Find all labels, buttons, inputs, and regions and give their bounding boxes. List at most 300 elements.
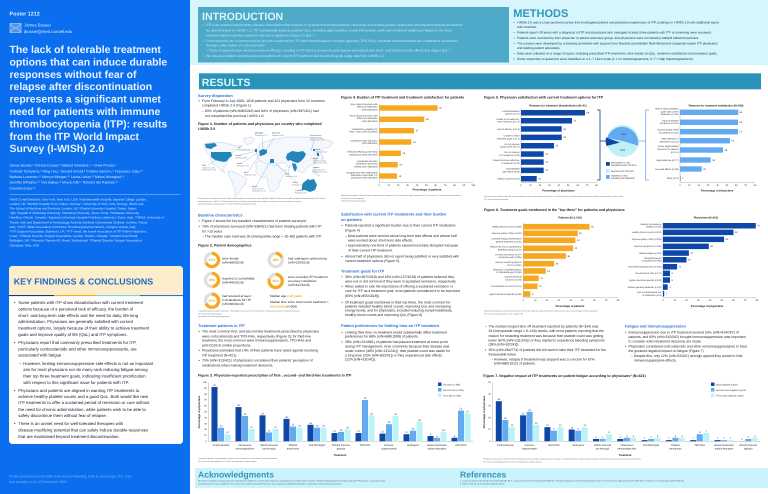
figure 3 y axis: 40 [204, 416, 208, 419]
figure 2: demographic rings: (n/N=490/1018) [222, 280, 244, 284]
text block: patient preferences: 28% (n/N=241/861) of patients had paused treatment at some point [345, 340, 448, 344]
satisfaction values [682, 111, 743, 180]
figure 4 x axis [379, 184, 476, 187]
text block: baseline characteristics: Figure 2 shows the key baseline characteristics of patients surveyed. [202, 219, 307, 223]
text block: baseline characteristics: • [198, 225, 200, 229]
figure 2: demographic rings: 67% [209, 258, 215, 262]
figure 7 y axis: 0 [490, 440, 492, 443]
physicians x axis: 70 [744, 299, 747, 302]
map country labels: Patients n=60 [244, 174, 256, 176]
figure 3 bar values: 44 [370, 412, 373, 415]
figure 4 footnote: Data from full patient population. [341, 200, 367, 203]
figure 7 footnote: ITP, immune thrombocytopenia; TPO-RAs, thrombopoietin receptor agonists. [483, 460, 543, 463]
text block: time off treatment: (n/N=680/1012) of patients. [494, 362, 536, 366]
dissatisfaction labels: Safety concerns (n=5) [497, 178, 520, 181]
text block: treatment goals: Treatment goals for ITP [341, 268, 385, 273]
text block: time off treatment: • [485, 348, 487, 352]
figure 4 category labels: benefit (n/N=196/1016) [354, 165, 378, 168]
figure 6: physicians bar chart: Percentage of physicians [691, 305, 724, 308]
figure 7 bar values: 3 [675, 435, 677, 438]
figure 7 bar values: 10 [570, 426, 574, 430]
dissatisfaction values: 43 [563, 136, 567, 139]
figure 4 category labels: Difficulty keeping up with daily [348, 151, 378, 154]
figure 4 category labels: (n/N=630/1016) [362, 108, 378, 111]
physicians x axis: 30 [697, 299, 700, 302]
dissatisfaction labels: Do not improve [504, 143, 520, 146]
text block: fatigue and immunosuppression: Physicians considered corticosteroids and other immunosuppressants to have [628, 344, 747, 348]
figure 7 legend: Second most negative impact [716, 389, 746, 392]
figure 7 bar values: 14 [535, 422, 538, 425]
map country labels: Denmark [272, 132, 281, 134]
figure 4 x axis: 30 [406, 184, 409, 187]
text block: satisfaction: • [342, 254, 344, 258]
text block: treatment goals: cure for ITP as a treatment goal, most patients considered it to be important [345, 289, 460, 293]
figure 2: demographic rings: had received at least [222, 294, 251, 298]
physicians x axis [662, 299, 759, 302]
figure 3 category labels: Anti-CD20 [455, 444, 467, 447]
physicians x axis: 0 [662, 299, 664, 302]
patients x axis: 10 [534, 299, 537, 302]
contact details: James Bussel [24, 22, 51, 27]
figure 3 bar values: 23 [220, 425, 223, 428]
figure 5 footnote: ITP, immune thrombocytopenia. [484, 198, 509, 201]
figure 2: demographic rings: (n/N=683/1018) [222, 302, 244, 306]
satisfaction labels: Wide selection of [661, 138, 679, 141]
figure 7 footnote [483, 458, 642, 463]
affiliations: ¹Weill Cornell Medicine, New York, New York, USA; ²Hammersmith Hospital, Imperial College London, [10, 197, 147, 201]
text block: treatment patterns: Treatment patterns in ITP [198, 323, 245, 328]
physicians labels: Slow/halt/prevent [644, 257, 662, 260]
figure 7 bar values: 2 [620, 436, 622, 439]
map country labels: Patients n=50 [272, 134, 284, 137]
figure 3 bar values: 23 [298, 425, 301, 428]
figure 3 bar values: 14 [357, 430, 360, 433]
text block: survey disposition [198, 93, 325, 118]
figure 3 bar values: 9 [430, 433, 432, 436]
figure 5: dissatisfaction bar chart: Percentage of physicians [542, 190, 575, 192]
figure 7 bar values: 3 [754, 435, 756, 438]
figure 7 category labels: Immuno- [525, 444, 535, 447]
physicians labels: Reduce spontaneous [640, 223, 662, 226]
figure 2: demographic rings: (n/N=688/1018) [222, 260, 244, 264]
dissatisfaction values: 43 [563, 128, 567, 131]
figure 7 bar values: 12 [583, 424, 587, 427]
authors: Caroline Enzer¹⁹ [10, 186, 36, 190]
affiliations: Cleveland, Ohio, USA [10, 243, 40, 247]
physicians values: 20 [688, 259, 691, 262]
satisfaction x axis: 50 [726, 184, 729, 187]
text block: treatment patterns: anti-CD20 at similar proportions. [202, 344, 251, 348]
title: Survey (I-WISh) 2.0 [10, 144, 104, 155]
panel: top band [190, 0, 768, 65]
figure 1 title: I-WISh 2.0 [198, 127, 215, 131]
text block: fatigue and immunosuppression: immunosuppressive effects. [634, 358, 677, 362]
figure 3 bar values: 47 [466, 411, 469, 414]
text block: fatigue and immunosuppression: the greatest negative impact on fatigue (Figure 7) [628, 349, 704, 353]
key findings text: There is an unmet need for well-tolerated therapies with [18, 421, 124, 426]
text block: time off treatment: – [485, 324, 487, 328]
figure 3 bar values: 18 [412, 428, 415, 431]
dissatisfaction values: 54 [574, 120, 577, 123]
satisfaction labels [655, 108, 679, 180]
map country labels: Patients n=80 [235, 156, 247, 160]
figure 5: satisfaction pie chart [606, 125, 639, 180]
authors: Yoshiaki Tomiyama,⁶ Ming Hou,⁷ Donald Arnold,⁸ Cristina Santoro,⁹ Francesco Zaja,¹⁰ [10, 169, 143, 173]
satisfaction labels: (n=114) [671, 151, 679, 154]
introduction text: – These treatments have limited sustained efficacy, resulting in ITP chronic treatment, and may be associated with short- and long-term side effects that impact QoL.⁵ [206, 49, 451, 53]
physicians values: 4 [669, 286, 671, 289]
dissatisfaction labels: term remission (n=17) [498, 121, 520, 124]
dissatisfaction labels [493, 110, 520, 181]
figure 7 bar values: 25 [528, 409, 532, 412]
figure 3 title: Figure 3. Physician-reported prescription of first-, second- and third-line treatments in ITP [198, 374, 352, 378]
figure 2: demographic rings: had undergone splenectomy [288, 256, 327, 260]
introduction text: Corticosteroids are recommended as first-line treatment for ITP, while thrombopoietin receptor agonists (TPO-RAs), rituximab and fostamatinib are established second-line [206, 39, 458, 43]
figure 7 bar values: 3 [657, 435, 659, 438]
text block: satisfaction: of their current ITP treatment. [348, 248, 393, 252]
figure 1 footnote: The participant numbers from each country include patients and physicians who completed I-WISh 2.0 and were recruited by Adelphi fieldwork partners; ITP, immune [198, 197, 326, 200]
text block: patient preferences: under control (40% [n/N=131/241]), their platelet count was stable for [345, 349, 451, 353]
figure 3 category labels: (no therapy) [262, 448, 276, 450]
methods text: I-WISh 2.0 was a cross-sectional survey that investigated patient and physician experiences of ITP, building on I-WISh 1.0 with additional topics [517, 20, 720, 24]
figure 2 footnote [198, 310, 301, 318]
physicians labels: bleeds (n=333) [646, 226, 662, 229]
physicians values: 79 [757, 225, 760, 228]
satisfaction labels: for patients (n=152) [659, 132, 679, 134]
figure 4 x axis: 70 [444, 184, 447, 187]
text block: time off treatment: lower (67% [n/N=151/241]) or they started to experience bleeding symptoms [488, 338, 605, 342]
figure 4 x axis: 50 [425, 184, 428, 187]
text block: time off treatment: – However, relapse if treatment was stopped was a concern for 67% [491, 357, 595, 361]
patients labels: of steroids/drugs (n=196) [496, 271, 522, 274]
text block: time off treatment: (38% [n/N=92/241]). [488, 343, 519, 347]
pie legend [606, 162, 637, 180]
text block: patient preferences: preferences for 68% (n/N=688/1008) of patients. [345, 334, 419, 338]
figure 4 category labels: Disagree that their medications [346, 171, 378, 174]
figure 2: demographic rings: 2 medications for ITP [222, 298, 251, 302]
pie legend: Dissatisfied or very [611, 162, 631, 164]
figure 4 category labels: treatment's perceived [356, 163, 378, 166]
affiliations: Italy; ¹¹APIT, Italian Association of Immune Thrombocytopenia Patients, Cologna Veneta, Italy; [10, 225, 136, 229]
figure 6: patients bar chart: Percentage of patients [556, 305, 585, 308]
map country labels: Physicians n=19 [313, 170, 327, 174]
text block: fatigue and immunosuppression: patients, and 63% (n/N=315/502) thought immunosuppression was important [628, 335, 746, 339]
affiliations [10, 197, 164, 247]
dissatisfaction values: 68 [586, 112, 590, 115]
map country labels: Patients n=50 [310, 136, 322, 140]
figure 7 bar values: 9 [578, 428, 580, 431]
satisfaction x axis: 60 [735, 184, 738, 187]
patients x axis: 0 [523, 299, 525, 302]
figure 7 category labels [497, 444, 758, 450]
map country labels: Patients n=72 [255, 134, 267, 137]
map country labels: Patients n=70 [237, 164, 249, 168]
figure 4 category labels [346, 103, 378, 180]
figure 7 bar values: 1 [693, 437, 695, 440]
text block: patient preferences: • [342, 330, 344, 334]
figure 3 bar values: 23 [316, 425, 319, 428]
dissatisfaction values: 24 [545, 169, 549, 172]
figure 4 x axis: 10 [387, 184, 391, 187]
text block: treatment patterns: 73% (n/N=313/421) of physicians considered their patients' perception of [202, 359, 313, 363]
map country labels: Patients n=30 [313, 168, 325, 172]
figure 3 bar values: 14 [333, 430, 336, 433]
figure 7 legend: Third most negative impact [716, 394, 744, 398]
figure 7 y axis: 20 [488, 416, 492, 419]
figure 3 y axis: 60 [204, 405, 208, 408]
figure 3 bar values: 20 [346, 426, 349, 430]
methods text: • [514, 36, 515, 40]
methods text: The surveys were developed by a steering committee with support from Novartis and Adelphi Real World and comprised expert ITP physicians [517, 41, 718, 45]
figure 7 bar values: 3 [626, 435, 628, 438]
panel: left sidebar [0, 0, 190, 494]
figure 3 y axis: 20 [204, 428, 208, 431]
icon: email envelope [10, 24, 21, 32]
satisfaction values: 54 [732, 140, 735, 143]
satisfaction x axis: 70 [744, 184, 748, 187]
patients labels [489, 226, 522, 296]
figure 3 category labels: Watch-and-wait [260, 444, 278, 447]
figure 3 bar values: 58 [237, 404, 240, 407]
introduction text: ITP is an acquired autoimmune disease characterized by reduced or persistent thrombocytopenia caused by accelerated platelet destruction and impaired platelet production¹ [206, 23, 464, 27]
affiliations: Trieste, Italy and Department of Hematology, Azienda Sanitaria Universitaria Giuliana, Isontina, Trieste, [10, 220, 148, 224]
text block: survey disposition: not completed the previous I-WISh 1.0. [205, 114, 264, 118]
figure 7 category labels: Anti-CD20 [548, 444, 560, 447]
satisfaction values: 60 [740, 121, 743, 124]
map country labels: France [235, 154, 241, 157]
patients labels: Reduce the risk of spontaneous [490, 246, 522, 249]
text block: satisfaction: were worried about short-term side effects. [348, 238, 413, 242]
key findings text: • [14, 388, 16, 393]
meeting footnote [9, 474, 132, 484]
figure 3 legend: First line (n=395) [443, 384, 461, 386]
key findings text: • [14, 421, 16, 426]
figure 4 values: 23 [402, 152, 406, 155]
figure 4 x axis: 100 [471, 184, 476, 187]
dissatisfaction labels: ITP symptoms (n=8) [499, 154, 520, 157]
figure 3 y axis: 10 [204, 434, 208, 437]
satisfaction labels: Drives target platelet [658, 145, 679, 148]
dissatisfaction x axis: 70 [586, 184, 589, 187]
figure 3 category labels: Intravenous [238, 444, 252, 447]
map country labels: Taiwan [313, 166, 320, 169]
text block: satisfaction: Satisfaction with current ITP treatments and their burden [341, 212, 447, 217]
physicians values: 12 [679, 266, 682, 269]
methods text: Patients aged >18 years with a diagnosis of ITP and physicians who managed at least three patients with ITP at screening were surveyed. [517, 30, 712, 34]
physicians x axis: 10 [674, 299, 677, 302]
text block: time off treatment: reason for restarting treatment was because their platelet count was getting [488, 334, 603, 338]
key findings text: • [14, 300, 16, 305]
satisfaction values: 1 [682, 177, 684, 180]
figure 7 bar values: 1 [644, 437, 646, 440]
figure 7: grouped bar chart: Percentage of physicians [483, 395, 486, 428]
satisfaction x axis: 20 [698, 184, 701, 187]
figure 1 title: Figure 1. Number of patients and physicians per country who completed [198, 122, 322, 126]
figure 3 bar values: 52 [460, 408, 463, 411]
map country labels: Patients n=150 [202, 166, 215, 170]
affiliations: The School of Medicine and Dentistry, London, UK; ⁶Osaka University Hospital, Osaka, Japan; [10, 206, 137, 210]
dissatisfaction labels: quality of life (n=11) [500, 146, 520, 149]
figure 4: horizontal bar chart: Percentage of patients [413, 189, 442, 192]
figure 7 bar values: 2 [650, 436, 652, 439]
text block: fatigue and immunosuppression: – Despite this, only 12% (n/N=52/421) strongly agreed they aimed to limit [631, 354, 742, 358]
figure 5: satisfaction bar chart: Reasons for treatment satisfaction (N=268) [689, 105, 743, 108]
map country labels: India [285, 172, 290, 176]
patients labels: function (n=133) [505, 278, 522, 282]
physicians x axis: 60 [732, 299, 735, 302]
figure 2: demographic rings: at survey completion [288, 279, 317, 283]
satisfaction labels: symptoms (n=154) [660, 122, 679, 125]
panel: methods [513, 8, 720, 61]
figure 3 bar values: 29 [388, 421, 391, 424]
figure 2: demographic rings: were female [222, 256, 239, 260]
figure 6: patients bar chart [489, 216, 620, 308]
figure 7 category labels: Intravenous [620, 444, 634, 447]
methods text: Some responses to questions were classified on a 1–7 Likert scale (1 = no impact/agreement; 6–7 = high impact/agreement). [517, 57, 694, 61]
patients values: 56 [591, 226, 594, 228]
physicians labels: Decreased hospitalization (n=50) [629, 266, 662, 269]
figure 3 category labels: Platelet [289, 444, 297, 447]
patients labels: Improve physical [505, 276, 522, 279]
text block: time off treatment: 35% (n/N=264/774) of patients did not want to take their ITP treatment for the [488, 348, 606, 352]
physicians labels: Reduce fatigue (n=94) [639, 252, 662, 255]
methods text: • [514, 57, 515, 61]
map country labels: USA [202, 164, 207, 167]
key findings text: their top three treatment goals, indicating insufficient prioritization [23, 374, 146, 378]
text block: time off treatment: 34 (interquartile range = 6–104) weeks, with most patients reporting that the [488, 329, 604, 333]
text block: treatment patterns: Physicians estimated that 14% of their patients have opted against receiving [202, 349, 318, 353]
figure 3 bar values: 16 [442, 429, 445, 432]
figure 7 category labels: Platelet [671, 444, 680, 447]
figure 3 bar values: 70 [364, 397, 367, 400]
acknowledgments [198, 469, 385, 485]
figure 4 category labels: medications (n/N=234/1016) [349, 153, 378, 156]
figure 3 category labels: Androgens [407, 444, 420, 447]
text block: fatigue and immunosuppression: to consider when treatment decisions are made. [628, 339, 702, 343]
figure 2: demographic rings: were receiving ITP treatment [288, 275, 328, 279]
figure 5: satisfaction pie chart: 64% [621, 133, 627, 136]
key findings text: administration. Physicians are generally satisfied with current [18, 319, 134, 324]
figure 7 category labels: TPO-RAs [694, 444, 706, 447]
figure 2: demographic rings: reported ≥1 comorbidity [222, 276, 255, 280]
key findings text: associated with fatigue [18, 352, 62, 358]
contact details [23, 22, 73, 34]
figure 7 bar values: 1 [730, 437, 732, 440]
patients values: 19 [547, 270, 551, 273]
affiliations: Israel; ¹⁴Platelet Disorder Support Association, London, Ontario, Canada; ¹⁵Adelphi Real World, [10, 234, 138, 238]
dissatisfaction labels: Patients become refractory [493, 159, 520, 162]
physicians values: 39 [710, 245, 714, 248]
figure 6 footnote: Patients and physicians were asked to select the three most important goals of treatment; responses are shown as percentages of each population. [484, 310, 599, 312]
text block: survey disposition: Survey disposition [198, 93, 233, 98]
affiliations: Hamilton, Ontario, Canada; ⁹Sapienza University Hospital Policlinico Umberto I, Rome, Italy; ¹⁰SRSA, University of [10, 216, 164, 220]
figure 7 bar values: 2 [595, 436, 597, 439]
figure 3 footnote [198, 457, 278, 463]
text block: treatment goals: (83% [n/N=855/1018]). [345, 294, 380, 298]
pie legend: dissatisfied (n/N=31/421) [611, 164, 637, 167]
introduction text: • [202, 39, 204, 43]
figure 6 footnote: ITP, immune thrombocytopenia; QoL, quality of life. [484, 312, 524, 315]
figure 4 category labels: Bothered by needing ITP [353, 128, 378, 131]
figure 4 title: Figure 4. Burden of ITP treatment and treatment satisfaction for patients [341, 95, 464, 99]
introduction text: • [202, 23, 204, 27]
figure 3 category labels [213, 444, 467, 450]
dissatisfaction labels: side effects (n=8) [502, 170, 520, 173]
patients labels: Increase energy levels/reduce [491, 238, 522, 241]
text block: treatment goals: • [342, 300, 344, 304]
figure 5 footnote [484, 195, 624, 201]
patients x axis: 40 [569, 299, 573, 302]
text block: fatigue and immunosuppression: • [625, 331, 627, 335]
patients labels: Improve overall symptoms [495, 261, 522, 264]
satisfaction labels: Improve quality of life [657, 129, 679, 132]
text block: treatment patterns: • [198, 359, 200, 363]
figure 5: dissatisfaction bar chart: Reasons for treatment dissatisfaction (N=31) [529, 105, 587, 108]
text block: treatment patterns: • [198, 349, 200, 353]
text block: baseline characteristics: • [198, 219, 200, 223]
map country labels: Germany [255, 132, 264, 134]
figure 7 category labels: Anti-fibrinolytic [643, 444, 660, 447]
figure 7 bar values: 7 [706, 430, 708, 433]
figure 7 legend: Most negative impact [716, 384, 738, 386]
title: from the ITP World Impact [10, 132, 140, 143]
physicians labels: Less strong/frequent use [637, 291, 662, 294]
figure 3 category labels: transfusion [287, 448, 300, 450]
dissatisfaction labels: Do not improve [504, 151, 520, 154]
map country labels: Physicians n=70 [202, 168, 216, 172]
satisfaction labels: Improve disease [662, 119, 679, 122]
dissatisfaction labels: to treatment (n=8) [502, 162, 520, 165]
methods text: • [514, 30, 515, 34]
figure 6 footnote [484, 310, 599, 315]
figure 4 x axis: 80 [453, 184, 456, 187]
methods text: Data were collected on a range of topics, including prescribed ITP treatments, their impact on QoL, treatment satisfaction and treatment goals. [517, 51, 717, 55]
figure 3 category labels: Anti-fibrinolytic [309, 444, 326, 447]
title: need for patients with immune [10, 107, 160, 118]
figure 7 footnote: *Physicians were asked to rank the top three treatments with the greatest negative impact on fatigue; †Cyclophosphamide, mycophenolate, ciclosporin and azathioprine, among other immunosuppressants. [483, 458, 642, 460]
dissatisfaction labels: Unable to reach [504, 134, 520, 138]
figure 7 bar values: 12 [510, 424, 514, 427]
physicians labels: Reduce general weakness (n=16) [628, 286, 662, 289]
key findings text: Physicians and patients are aligned in wanting ITP treatments to [18, 388, 140, 393]
figure 2: demographic rings: 60 months (n=506) [270, 304, 297, 308]
figure 7 bar values: 2 [748, 436, 750, 439]
dissatisfaction x axis: 0 [520, 184, 522, 187]
figure 7 y axis: 30 [488, 405, 492, 408]
text block: survey disposition: completed I-WISh 2.0 (Figure 1) [202, 104, 251, 108]
references [460, 469, 685, 485]
figure 1 footnote [198, 197, 326, 206]
figure 7 y axis [488, 381, 492, 443]
text block: treatment patterns: medications when making treatment decisions. [202, 363, 273, 367]
figure 7: grouped bar chart [483, 381, 760, 457]
title: relapse after discontinuation [10, 82, 152, 93]
text block: treatment goals: Of treatment goals mentioned in their top three, the most common for [345, 300, 451, 304]
figure 3: grouped bar chart: Treatment [334, 454, 347, 457]
figure 7 bar values: 0 [741, 438, 743, 441]
satisfaction labels: Few side effects (n=58) [655, 168, 679, 171]
satisfaction values: 57 [740, 131, 743, 134]
title: The lack of tolerable treatment [10, 45, 161, 56]
figure 3 bar values: 43 [394, 413, 397, 416]
map leader lines [208, 137, 318, 190]
figure 7 y axis: 50 [488, 381, 492, 384]
patients labels: Prevent/treat iron loss (n=124) [491, 285, 522, 288]
text block: survey disposition: • [198, 99, 200, 103]
figure 7 bar values: 1 [723, 437, 725, 440]
pie legend: satisfied (n/N=268/421) [611, 177, 635, 180]
key findings text: treatment options, largely because of their ability to achieve treatment [18, 326, 150, 330]
